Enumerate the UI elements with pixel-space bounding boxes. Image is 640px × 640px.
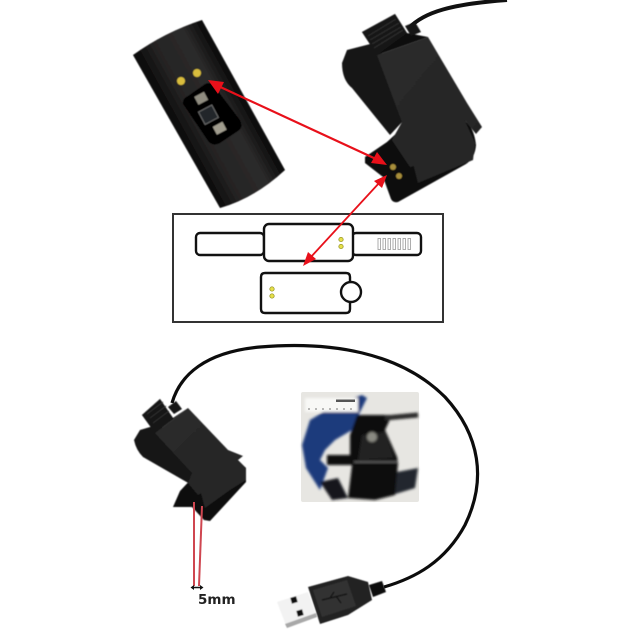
diagram panel: contact positions	[173, 214, 443, 322]
tracker sensor window	[183, 83, 242, 145]
strap holes	[378, 238, 410, 250]
cable: lower long cable	[172, 345, 478, 587]
detached tracker outline	[261, 273, 350, 313]
photo: charging clip upper	[342, 14, 482, 202]
label: 5mm: 5mm	[198, 592, 236, 608]
photo: fitness tracker underside	[133, 20, 285, 208]
cable: upper clip cable	[409, 0, 507, 28]
tracker button circle	[341, 282, 361, 302]
photo cable	[385, 415, 418, 418]
photo: charging clip lower	[134, 399, 246, 521]
icon: tracker contacts	[270, 287, 274, 298]
wristband lower end	[320, 478, 348, 500]
icon: band contacts	[339, 237, 343, 249]
arrow: clip pins to diagram	[303, 175, 387, 266]
dimension: spacing arrow	[190, 585, 204, 590]
band right strap	[352, 233, 421, 255]
icon: clip pins	[390, 164, 402, 179]
sticker strip	[305, 398, 358, 412]
band centre module	[264, 224, 353, 261]
band left strap	[196, 233, 264, 255]
clip on band	[327, 415, 398, 500]
icon: tracker gold charging contacts	[177, 69, 201, 85]
arrow: tracker to clip pins	[208, 80, 387, 165]
icon: USB plug	[277, 576, 386, 628]
photo: clip on wristband	[301, 392, 419, 502]
dimension: pin spacing lines	[194, 502, 202, 586]
wristband	[302, 395, 367, 490]
